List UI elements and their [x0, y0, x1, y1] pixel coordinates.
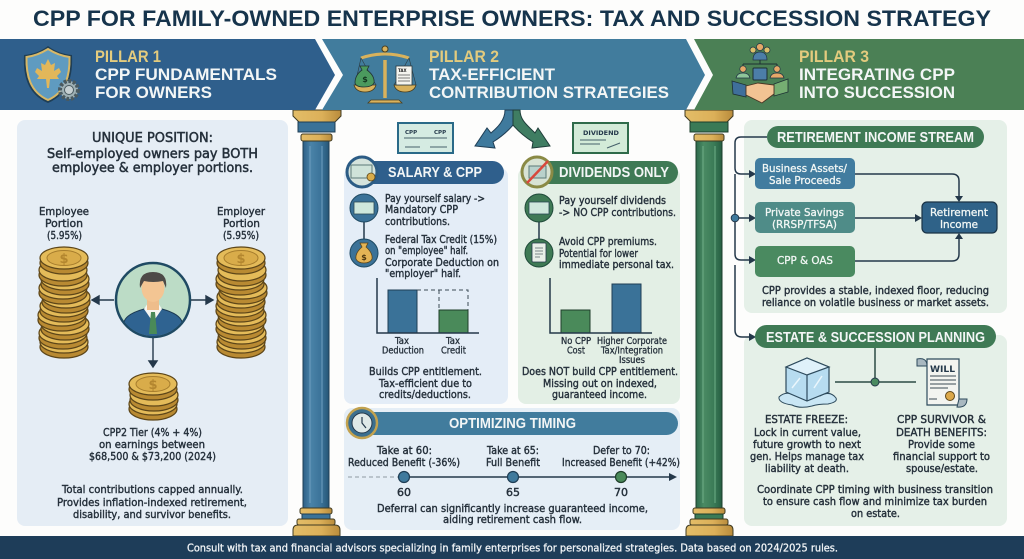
- icon: salary cheque: [350, 194, 378, 240]
- dividends text: Pay yourself dividends: [559, 195, 666, 207]
- unique position statement: [47, 131, 258, 176]
- pillar 2 heading: CONTRIBUTION STRATEGIES: [429, 84, 669, 102]
- connector to estate header: [735, 265, 756, 341]
- timing option: age 70: [562, 445, 680, 469]
- salary summary: credits/deductions.: [379, 389, 471, 401]
- avoid premiums text: Avoid CPP premiums.: [559, 236, 657, 248]
- bar chart: CPP cost vs corporate tax: Tax/Integration: [600, 346, 663, 356]
- stream note: CPP provides a stable, indexed floor, reducing: [762, 285, 989, 297]
- panel: retirement income stream: [731, 120, 1007, 313]
- timing option: age 60: Reduced Benefit (-36%): [348, 457, 460, 469]
- employer portion label: Portion: [223, 218, 260, 230]
- tax credit text: Federal Tax Credit (15%): [385, 234, 497, 246]
- bar chart: CPP cost vs corporate tax: No CPP: [561, 336, 591, 347]
- contribution cap note: disability, and survivor benefits.: [73, 509, 231, 521]
- banner: pillar 2: [322, 39, 705, 110]
- pillar 3 heading: INTEGRATING CPP: [799, 66, 955, 84]
- contribution cap note: Provides inflation-indexed retirement,: [57, 497, 247, 509]
- icon: will document: WILL: [930, 365, 955, 375]
- icon: ice cube: [779, 358, 836, 407]
- icon: employer coin stack: [216, 247, 267, 358]
- bar chart: tax deduction vs credit: Tax: [445, 336, 460, 347]
- tax credit text: on "employee" half.: [385, 245, 468, 257]
- dividends summary: guaranteed income.: [552, 389, 647, 401]
- arrow: to employer portion: [191, 296, 213, 304]
- unique position statement: employee & employer portions.: [52, 161, 253, 176]
- retirement income outcome: Income: [940, 219, 978, 231]
- employer portion label: Employer: [217, 206, 266, 218]
- timing option: age 65: Take at 65:: [486, 445, 539, 457]
- bar chart: CPP cost vs corporate tax: [550, 278, 667, 366]
- dividends text: -> NO CPP contributions.: [559, 207, 676, 219]
- retirement income outcome: Retirement: [930, 207, 988, 219]
- salary header: SALARY & CPP: [388, 164, 482, 181]
- panel: optimizing timing: [344, 408, 680, 530]
- icon: CPP cheque: CPP: [434, 130, 446, 136]
- CPP2 tier text: [89, 427, 216, 463]
- pillar 1 heading: CPP FUNDAMENTALS: [95, 66, 277, 84]
- icon: business owner portrait: [116, 263, 190, 340]
- timing option: age 70: Defer to 70:: [593, 445, 650, 457]
- avoid premiums text: [559, 236, 674, 271]
- pillar 3 heading: [799, 66, 955, 102]
- bar chart: tax deduction vs credit: Deduction: [382, 346, 424, 356]
- timeline: 70: [614, 487, 628, 499]
- icon: balance scales: [354, 46, 416, 103]
- estate freeze text: gen. Helps manage tax: [750, 451, 864, 463]
- icon: clipboard: [525, 239, 553, 267]
- bar chart: CPP cost vs corporate tax: Higher Corporate: [597, 336, 667, 347]
- unique position statement: UNIQUE POSITION:: [92, 131, 213, 146]
- dividends header: [522, 157, 678, 187]
- CPP2 tier text: $68,500 & $73,200 (2024): [89, 451, 216, 463]
- CPP2 tier text: on earnings between: [99, 439, 205, 451]
- deferral note: aiding retirement cash flow.: [443, 514, 582, 526]
- salary text: Pay yourself salary ->: [385, 193, 485, 205]
- survivor benefits text: spouse/estate.: [906, 463, 978, 475]
- estate connector: [835, 348, 916, 386]
- arrowheads: [749, 170, 963, 264]
- contribution cap note: Total contributions capped annually.: [61, 484, 243, 496]
- icon: employee coin stack: [38, 247, 90, 358]
- column: green: [685, 110, 733, 536]
- survivor benefits text: DEATH BENEFITS:: [896, 427, 987, 439]
- employee portion label: (5.95%): [47, 230, 82, 242]
- bar chart: tax deduction vs credit: [377, 278, 479, 356]
- dividends summary: [522, 366, 678, 401]
- estate freeze text: liability at death.: [765, 463, 849, 475]
- employer portion label: [217, 206, 266, 242]
- panel: estate and succession planning: [735, 265, 1007, 526]
- timing option: age 65: [486, 445, 540, 469]
- source: business assets: Sale Proceeds: [769, 175, 841, 187]
- contribution cap note: [57, 484, 247, 521]
- panel: CPP fundamentals: [17, 120, 288, 526]
- retirement income outcome: [922, 202, 997, 233]
- icon: split arrows: [475, 110, 550, 148]
- survivor benefits text: [893, 414, 990, 475]
- estate freeze text: Lock in current value,: [754, 427, 861, 439]
- connector lines: [735, 137, 959, 261]
- salary summary: [369, 366, 482, 401]
- survivor benefits text: Provide some: [908, 439, 975, 451]
- icon: money bag: [350, 239, 378, 267]
- flow node: [731, 214, 739, 222]
- timing option: age 60: [348, 445, 460, 469]
- tax credit text: "employer" half.: [385, 268, 461, 280]
- icon: money bag: $: [361, 253, 367, 262]
- deferral note: Deferral can significantly increase guaranteed income,: [377, 503, 648, 515]
- icon: balance scales: $: [362, 75, 368, 84]
- salary summary: Builds CPP entitlement.: [369, 366, 482, 378]
- source: business assets: [755, 158, 855, 189]
- stream header: [767, 126, 984, 148]
- dividends text: [559, 195, 676, 219]
- tax credit text: [385, 234, 499, 280]
- column: blue: [293, 110, 341, 536]
- pillar 2 heading: TAX-EFFICIENT: [429, 66, 555, 84]
- employee portion label: [39, 206, 89, 242]
- timing option: age 70: Increased Benefit (+42%): [562, 457, 680, 469]
- CPP2 tier text: CPP2 Tier (4% + 4%): [103, 427, 202, 439]
- source: business assets: Business Assets/: [762, 163, 847, 175]
- salary text: contributions.: [385, 216, 450, 228]
- icon: dividend cheque: [525, 194, 553, 240]
- coordination note: to ensure cash flow and minimize tax burden: [763, 496, 987, 508]
- survivor benefits text: financial support to: [893, 451, 990, 463]
- salary header: [347, 157, 504, 187]
- survivor benefits text: CPP SURVIVOR &: [897, 414, 986, 426]
- salary text: [385, 193, 485, 228]
- unique position statement: Self-employed owners pay BOTH: [47, 147, 258, 162]
- employee portion label: Employee: [39, 206, 89, 218]
- pillar 1 heading: FOR OWNERS: [95, 84, 212, 102]
- estate freeze text: [750, 414, 864, 475]
- estate header: ESTATE & SUCCESSION PLANNING: [766, 329, 985, 346]
- estate freeze text: future growth to next: [753, 439, 861, 451]
- stream note: [762, 285, 989, 309]
- icon: will document: [917, 359, 967, 407]
- icon: employee coin stack: $: [59, 252, 69, 267]
- employee portion label: Portion: [45, 218, 83, 230]
- stream header: RETIREMENT INCOME STREAM: [777, 129, 974, 146]
- pillar 2 label: PILLAR 2: [429, 48, 499, 66]
- icon: family and handshake: [732, 44, 788, 103]
- icon: CPP cheque: [398, 123, 453, 153]
- bar chart: CPP cost vs corporate tax: Cost: [567, 346, 585, 356]
- coordination note: [757, 484, 993, 520]
- deferral note: [377, 503, 648, 526]
- timing header: OPTIMIZING TIMING: [449, 415, 576, 432]
- tax credit text: Corporate Deduction on: [385, 257, 499, 269]
- pillar 1 label: PILLAR 1: [95, 48, 161, 66]
- dividends summary: Missing out on indexed,: [543, 378, 657, 390]
- arrow: to CPP2 tier: [149, 338, 157, 367]
- timing option: age 60: Take at 60:: [376, 445, 432, 457]
- arrow: to employee portion: [92, 296, 114, 304]
- pillar 2 heading: [429, 66, 669, 102]
- footer: [0, 536, 1024, 559]
- stream note: reliance on volatile business or market assets.: [762, 297, 989, 309]
- panel: salary and CPP: [344, 157, 508, 404]
- estate header: [755, 325, 996, 348]
- estate freeze text: ESTATE FREEZE:: [765, 414, 848, 426]
- bar chart: CPP cost vs corporate tax: Issues: [619, 355, 645, 366]
- source: private savings: (RRSP/TFSA): [772, 219, 837, 231]
- icon: dividend certificate: DIVIDEND: [583, 129, 620, 137]
- source: private savings: [755, 202, 855, 233]
- icon: CPP cheque: CPP: [405, 130, 417, 136]
- timing option: age 65: Full Benefit: [486, 457, 540, 469]
- title: CPP FOR FAMILY-OWNED ENTERPRISE OWNERS: TAX AND SUCCESSION STRATEGY: [33, 6, 991, 31]
- timeline: 65: [506, 487, 520, 499]
- coordination note: Coordinate CPP timing with business transition: [757, 484, 993, 496]
- timing header: [347, 408, 678, 438]
- icon: shield with maple leaf and gear: [24, 46, 78, 103]
- banner: pillar 1: [0, 39, 335, 110]
- coordination note: on estate.: [851, 508, 900, 520]
- footer: Consult with tax and financial advisors specializing in family enterprises for personalized strategies. Data based on 2024/2025 rules.: [187, 542, 838, 554]
- icon: balance scales: TAX: [398, 68, 407, 73]
- icon: CPP2 coin stack: $: [148, 378, 158, 393]
- timeline: 60: [397, 487, 411, 499]
- icon: dividend certificate: [573, 123, 628, 153]
- bar chart: tax deduction vs credit: Credit: [441, 346, 466, 356]
- pillar 1 heading: [95, 66, 277, 102]
- icon: CPP2 coin stack: [129, 373, 178, 420]
- source: private savings: Private Savings: [765, 207, 844, 219]
- avoid premiums text: Potential for lower: [559, 248, 639, 260]
- avoid premiums text: immediate personal tax.: [559, 259, 674, 271]
- pillar 3 heading: INTO SUCCESSION: [799, 84, 955, 102]
- icon: employer coin stack: $: [236, 252, 246, 267]
- timeline: [348, 472, 677, 499]
- source: CPP and OAS: CPP & OAS: [777, 255, 833, 267]
- salary text: Mandatory CPP: [385, 204, 458, 216]
- pillar 3 label: PILLAR 3: [799, 48, 869, 66]
- salary summary: Tax-efficient due to: [378, 378, 472, 390]
- source: CPP and OAS: [755, 246, 855, 277]
- employer portion label: (5.95%): [223, 230, 259, 242]
- dividends header: DIVIDENDS ONLY: [559, 164, 669, 181]
- bar chart: tax deduction vs credit: Tax: [394, 336, 409, 347]
- dividends summary: Does NOT build CPP entitlement.: [522, 366, 678, 378]
- panel: dividends only: [518, 157, 680, 404]
- banner: pillar 3: [694, 39, 1024, 110]
